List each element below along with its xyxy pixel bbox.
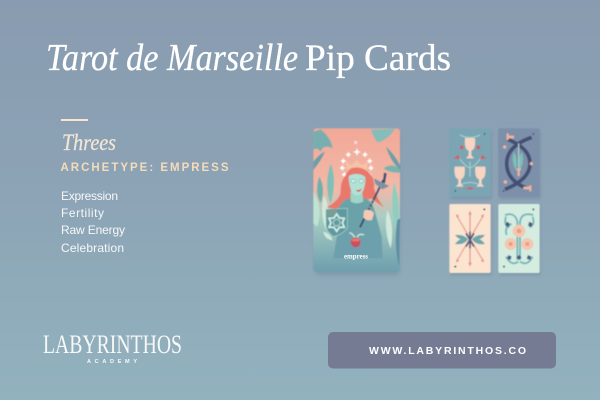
shield (326, 208, 347, 237)
logo: Labyrinthos Academy (43, 330, 182, 365)
title: Tarot de Marseille (46, 37, 298, 79)
text block: threes archetype (60, 119, 229, 255)
empress card (313, 128, 400, 275)
pip cards (449, 128, 541, 275)
keyword list: Fertility (61, 206, 104, 220)
leaves (313, 129, 400, 267)
stars and crown (339, 141, 374, 178)
title: Pip Cards (305, 38, 451, 79)
pomegranate (349, 233, 364, 238)
keyword list (61, 189, 125, 255)
keyword list: Expression (61, 189, 118, 203)
subheading: archetype: ARCHETYPE: EMPRESS (60, 162, 229, 174)
empress figure (323, 160, 389, 258)
title (46, 37, 451, 79)
button: website (328, 332, 556, 368)
pip card: three of wands (449, 204, 491, 273)
sceptre (360, 180, 383, 227)
button: website: WWW.LABYRINTHOS.CO (369, 345, 526, 357)
heading: Threes: Threes (62, 130, 116, 155)
keyword list: Celebration (61, 241, 124, 255)
pip card: three of pentacles (498, 204, 540, 273)
pip card: three of cups (449, 128, 491, 197)
card name: empress (344, 252, 368, 261)
logo: Labyrinthos Academy: ACADEMY (87, 359, 137, 365)
keyword list: Raw Energy (61, 223, 125, 237)
pip card: three of swords (498, 128, 540, 197)
logo: Labyrinthos Academy: LABYRINTHOS (43, 330, 182, 359)
